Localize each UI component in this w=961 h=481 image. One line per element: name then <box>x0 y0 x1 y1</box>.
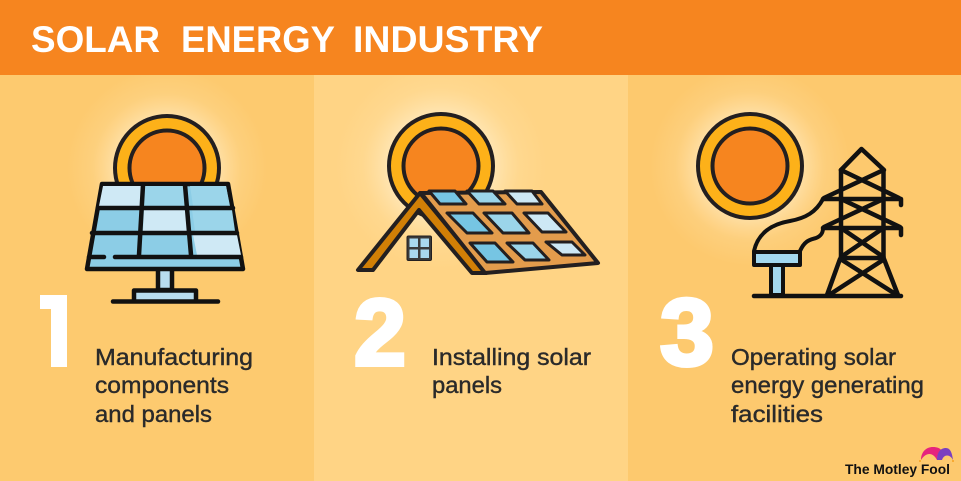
number 3: 3 <box>660 280 714 386</box>
title <box>31 19 543 60</box>
step 2 text: Installing solar <box>432 344 591 370</box>
panel: step 2 installing <box>354 114 598 398</box>
step 3 text: energy generating <box>731 372 924 398</box>
step 1 text: and panels <box>95 401 212 427</box>
panel: step 1 manufacturing <box>40 114 252 428</box>
logo: The Motley Fool: The Motley Fool <box>845 461 950 477</box>
step 2 text: panels <box>432 372 502 398</box>
icon: sun <box>698 114 802 218</box>
step 1 text: Manufacturing <box>95 344 253 370</box>
step 3 text: Operating solar <box>731 344 896 370</box>
title: ENERGY <box>181 19 335 60</box>
title: INDUSTRY <box>353 19 543 60</box>
panel: step 3 operating <box>660 114 930 427</box>
title: SOLAR <box>31 19 160 60</box>
icon: sun behind roof <box>389 114 493 218</box>
header banner <box>0 0 961 75</box>
icon: transmission tower and transformer <box>754 149 901 296</box>
number 2: 2 <box>354 280 406 386</box>
step 3 text: facilities <box>731 401 823 427</box>
icon: roof with solar panels <box>358 191 598 273</box>
icon: solar panel <box>87 184 243 302</box>
icon: sun behind solar panel <box>115 116 219 220</box>
icon: window <box>407 236 432 260</box>
icon: jester hat <box>919 447 954 462</box>
logo: The Motley Fool <box>845 447 954 477</box>
number 1: 1 <box>20 280 80 386</box>
step 1 text: components <box>95 372 229 398</box>
